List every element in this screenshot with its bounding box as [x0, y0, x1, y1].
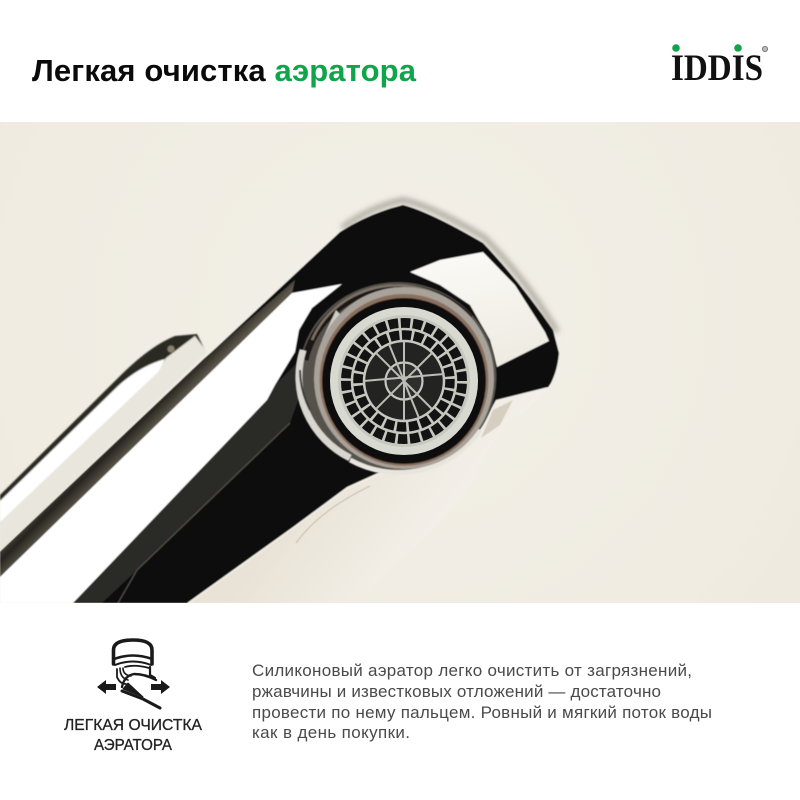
- icon: left arrow: [97, 680, 116, 694]
- logo: IDDIS: IDDIS: [671, 48, 763, 89]
- icon: aerator outline: [114, 640, 155, 684]
- icon caption: [64, 717, 202, 754]
- spout body: [0, 194, 560, 603]
- title: Легкая очистка аэратора: [32, 53, 417, 88]
- description text: Силиконовый аэратор легко очистить от загрязнений,: [252, 661, 692, 680]
- back pipe of the faucet: [0, 333, 204, 522]
- icon caption: АЭРАТОРА: [94, 737, 172, 754]
- aerator mesh: [330, 307, 478, 455]
- icon: finger: [122, 674, 160, 708]
- icon: right arrow: [151, 680, 170, 694]
- description text: [252, 661, 712, 742]
- photo: faucet spout with aerator: [0, 122, 800, 603]
- icon caption: ЛЕГКАЯ ОЧИСТКА: [64, 717, 202, 734]
- description text: как в день покупки.: [252, 723, 410, 742]
- description text: ржавчины и известковых отложений — достаточно: [252, 682, 661, 701]
- aerator housing rings: [298, 282, 496, 472]
- icon: finger cleaning aerator: [97, 640, 170, 708]
- description text: провести по нему пальцем. Ровный и мягкий поток воды: [252, 703, 712, 722]
